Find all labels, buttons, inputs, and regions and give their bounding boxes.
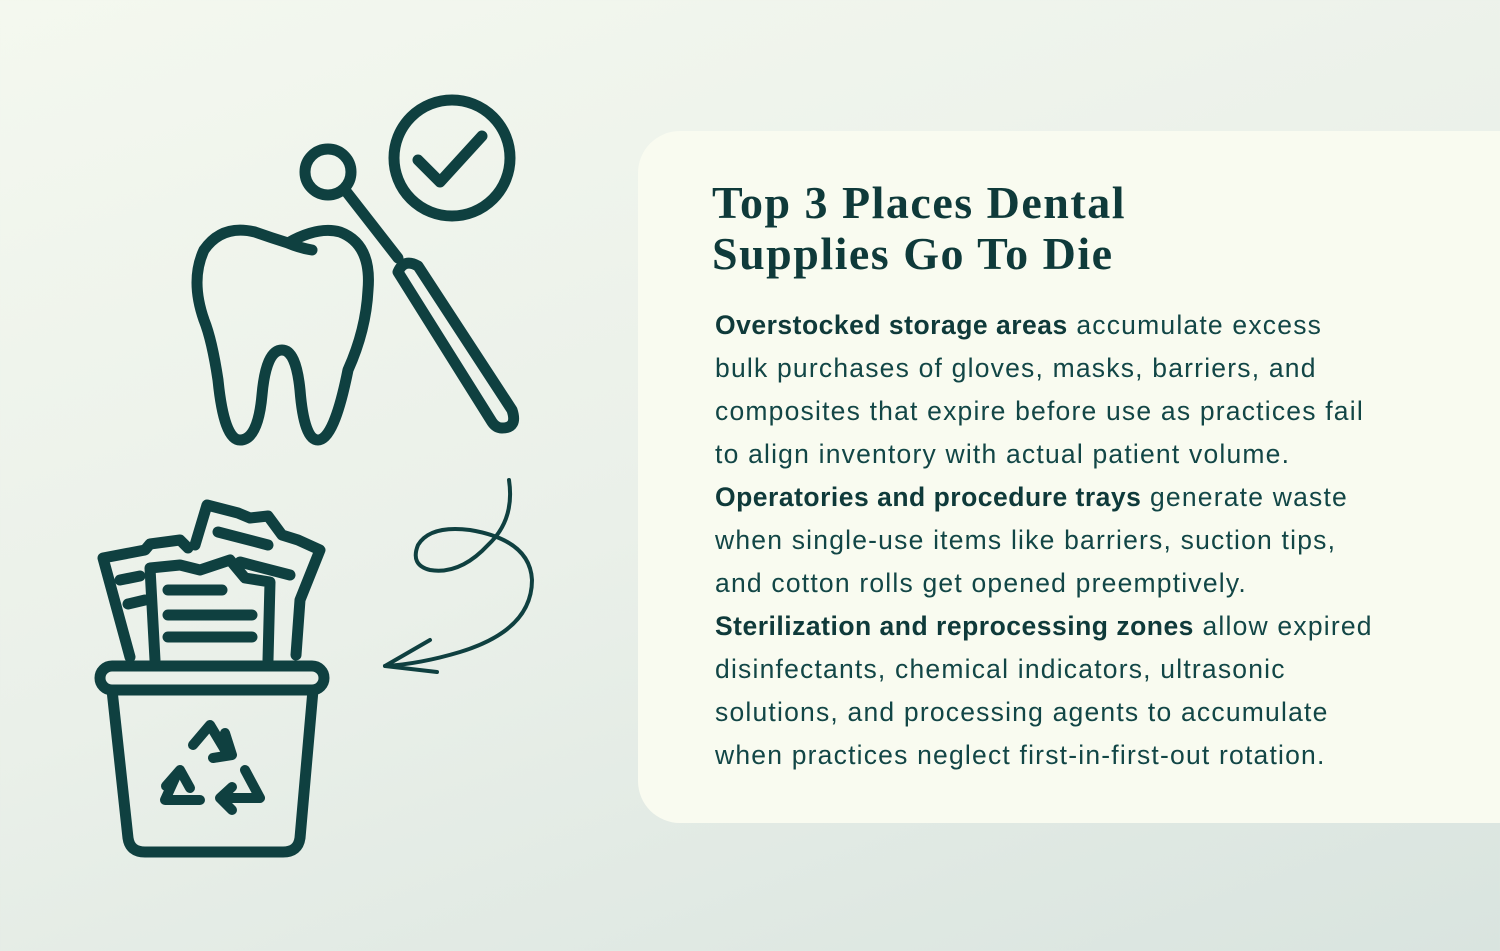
- text block: three places: Operatories and procedure trays generate waste: [715, 482, 1348, 512]
- text block: three places: [715, 310, 1373, 770]
- papers: [103, 505, 320, 660]
- bin body: [100, 666, 324, 852]
- text block: three places: bulk purchases of gloves, masks, barriers, and: [715, 353, 1317, 383]
- text block: three places: disinfectants, chemical indicators, ultrasonic: [715, 654, 1286, 684]
- text block: three places: Overstocked storage areas accumulate excess: [715, 310, 1322, 340]
- text block: three places: solutions, and processing agents to accumulate: [715, 697, 1329, 727]
- icon: tooth with mirror and check: [197, 100, 514, 440]
- title: Supplies Go To Die: [712, 228, 1114, 279]
- icon: tooth: [197, 230, 368, 440]
- text block: three places: when practices neglect first-in-first-out rotation.: [715, 740, 1326, 770]
- icon: recycling bin with papers: [100, 505, 324, 852]
- text block: three places: composites that expire before use as practices fail: [715, 396, 1364, 426]
- icon: dental mirror: [305, 149, 514, 428]
- arrow: hand-drawn curl pointing to bin: [385, 480, 532, 672]
- panel: text card: [638, 131, 1500, 823]
- text block: three places: to align inventory with actual patient volume.: [715, 439, 1290, 469]
- text block: three places: and cotton rolls get opened preemptively.: [715, 568, 1247, 598]
- text block: three places: Sterilization and reprocessing zones allow expired: [715, 611, 1373, 641]
- recycle symbol: [165, 725, 260, 810]
- title: Top 3 Places Dental: [712, 177, 1126, 228]
- icon: check circle: [394, 100, 510, 216]
- text block: three places: when single-use items like barriers, suction tips,: [715, 525, 1336, 555]
- title: [712, 177, 1126, 279]
